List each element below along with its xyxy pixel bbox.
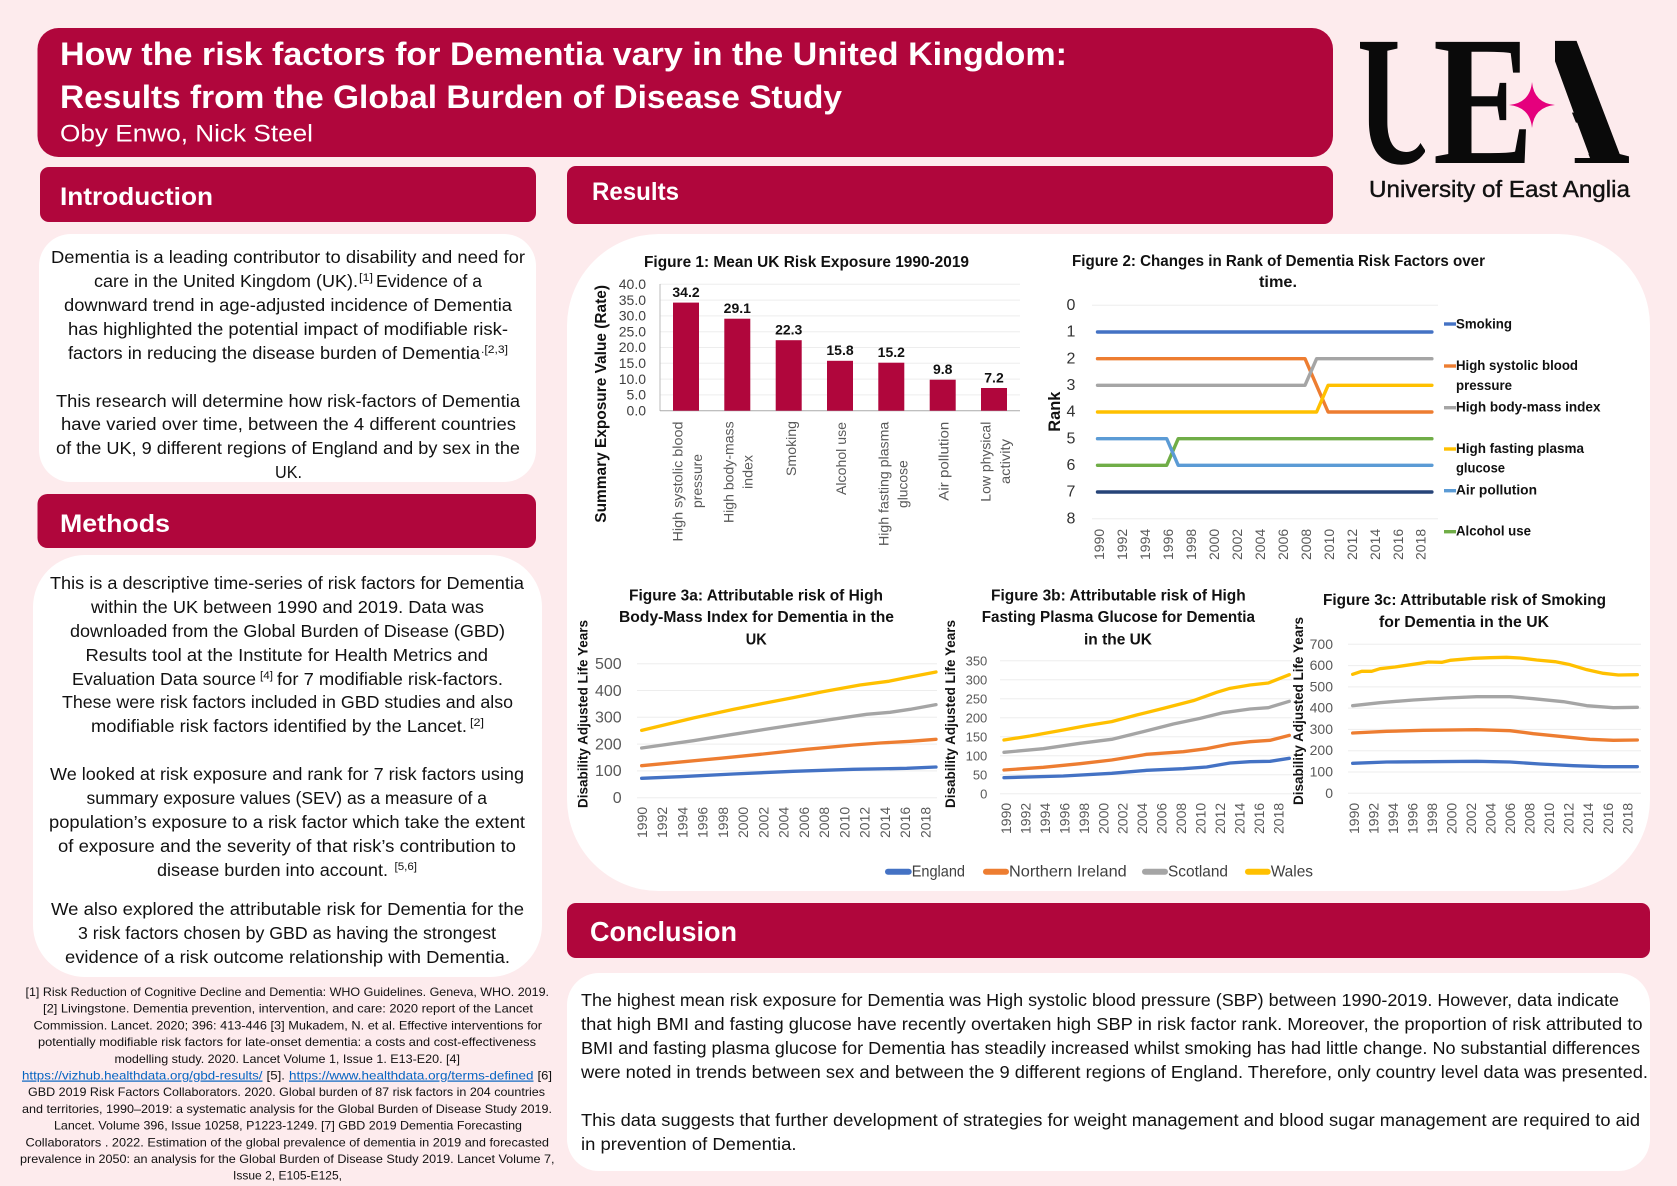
data lines <box>642 672 936 778</box>
y axis labels: 600 <box>1310 657 1333 673</box>
y axis labels: 35.0 <box>619 292 646 308</box>
y axis rank labels: 4 <box>1067 404 1076 421</box>
figure 3a title: Figure 3a: Attributable risk of High <box>629 588 883 605</box>
figure 3b title: in the UK <box>1084 632 1152 649</box>
x axis years: 1994 <box>1385 803 1401 834</box>
x axis years: 1990 <box>1091 529 1107 560</box>
x axis years: 2002 <box>1115 803 1131 834</box>
legend: countries <box>888 864 1313 881</box>
panel: conclusion text: that high BMI and fasting glucose have recently overtaken high SBP in risk factor rank. Moreover, the proportion of risk attributed to <box>581 1014 1643 1034</box>
x axis years: 2018 <box>1413 529 1429 560</box>
panel: conclusion text: were noted in trends between sex and between the 9 different regions of England. Therefore, only country level data was presented. <box>580 1062 1648 1082</box>
y axis labels: 25.0 <box>619 323 646 339</box>
y axis labels: 400 <box>595 683 622 700</box>
y axis labels: 150 <box>966 729 987 744</box>
x axis years: 2002 <box>755 807 771 838</box>
y axis labels: 200 <box>966 710 987 725</box>
x axis years: 1992 <box>654 807 670 838</box>
y axis labels <box>619 276 646 418</box>
legend: High body-mass index <box>1456 399 1601 415</box>
references: [1] Risk Reduction of Cognitive Decline and Dementia: WHO Guidelines. Geneva, WHO. 2019. <box>26 985 549 999</box>
x axis years: 2012 <box>1344 529 1360 560</box>
category labels: Smoking <box>783 421 799 476</box>
y axis labels: 200 <box>595 736 622 753</box>
references: and territories, 1990–2019: a systematic analysis for the Global Burden of Disease Study 2019. <box>22 1102 552 1116</box>
x axis years: 2010 <box>1541 803 1557 834</box>
category labels <box>670 421 1013 546</box>
legend: countries: Scotland <box>1168 864 1228 881</box>
bar value labels: 7.2 <box>984 370 1004 386</box>
references: modelling study. 2020. Lancet Volume 1, Issue 1. E13-E20. [4] <box>114 1052 460 1066</box>
y axis labels: 20.0 <box>619 339 646 355</box>
legend: countries: Wales <box>1271 864 1313 881</box>
y axis rank labels: 1 <box>1067 324 1076 341</box>
panel: introduction text: has highlighted the potential impact of modifiable risk- <box>68 319 508 339</box>
x axis years: 2008 <box>1298 529 1314 560</box>
bar value labels: 29.1 <box>724 300 751 316</box>
y axis labels: 0 <box>613 790 622 807</box>
x axis years: 2004 <box>1483 803 1499 834</box>
x axis years: 1996 <box>1160 529 1176 560</box>
figure 3b title: Figure 3b: Attributable risk of High <box>991 588 1246 605</box>
x axis years <box>634 807 933 838</box>
figure 3c title <box>1323 592 1606 631</box>
panel: methods text: evidence of a risk outcome relationship with Dementia. <box>65 947 510 967</box>
logo: University of East Anglia: E <box>1433 0 1534 204</box>
x axis years: 2016 <box>1600 803 1616 834</box>
references <box>20 985 554 1183</box>
bar value labels: 15.8 <box>826 342 854 358</box>
data lines <box>1353 657 1637 767</box>
figure 3a title: UK <box>746 632 767 649</box>
panel: introduction text: Dementia is a leading contributor to disability and need for <box>51 247 525 267</box>
x axis years: 2016 <box>897 807 913 838</box>
panel: methods text: disease burden into account. <box>157 860 388 880</box>
y axis labels: 15.0 <box>619 355 646 371</box>
figure 2 title <box>1072 253 1485 291</box>
panel: introduction text: have varied over time, between the 4 different countries <box>61 414 516 434</box>
category labels: High fasting plasma <box>875 421 891 546</box>
x axis years: 2018 <box>1619 803 1635 834</box>
x axis years: 2010 <box>836 807 852 838</box>
x axis years: 2006 <box>1275 529 1291 560</box>
panel: methods text: summary exposure values (SEV) as a measure of a <box>86 788 487 808</box>
references: [5]. <box>266 1068 285 1082</box>
y axis labels: 100 <box>966 748 987 763</box>
authors: Oby Enwo, Nick Steel <box>60 120 313 148</box>
y axis rank labels: 6 <box>1067 457 1076 474</box>
panel: introduction text: UK. <box>275 462 302 482</box>
bar value labels <box>672 284 1004 386</box>
x axis years: 1990 <box>1346 803 1362 834</box>
bar value labels: 34.2 <box>672 284 700 300</box>
x axis years: 2004 <box>1134 803 1150 834</box>
panel: introduction text: .[2,3] <box>481 344 508 356</box>
y axis rank labels: 7 <box>1067 484 1076 501</box>
x axis years: 2018 <box>917 807 933 838</box>
legend: countries: England <box>912 864 965 881</box>
y axis labels: 700 <box>1310 636 1333 652</box>
x axis years: 1994 <box>1037 803 1053 834</box>
panel: introduction text: factors in reducing the disease burden of Dementia <box>68 343 480 363</box>
heading: Results: Results <box>592 178 679 206</box>
category labels: Low physical <box>978 422 994 502</box>
y axis labels: 400 <box>1310 700 1333 716</box>
heading: Conclusion <box>567 903 1650 958</box>
x axis years: 1990 <box>998 803 1014 834</box>
logo: University of East Anglia: A <box>1496 0 1630 204</box>
panel: methods text: Evaluation Data source <box>72 669 256 689</box>
panel: conclusion text <box>567 973 1650 1171</box>
figure 3b title <box>982 588 1255 649</box>
panel: conclusion text: in prevention of Dementia. <box>581 1134 796 1154</box>
y axis labels <box>595 656 622 807</box>
references: Lancet. Volume 396, Issue 10258, P1223-1249. [7] GBD 2019 Dementia Forecasting <box>54 1119 522 1133</box>
heading: Introduction <box>40 167 536 222</box>
references: Issue 2, E105-E125, <box>233 1169 342 1183</box>
chart: Figure 3c smoking attributable risk <box>1290 592 1641 834</box>
x axis years: 2008 <box>1173 803 1189 834</box>
y axis labels: 100 <box>1310 764 1333 780</box>
chart: Figure 3a BMI attributable risk <box>574 588 937 838</box>
references: GBD 2019 Risk Factors Collaborators. 2020. Global burden of 87 risk factors in 204 countries <box>28 1085 545 1099</box>
y axis labels <box>966 653 987 801</box>
bars <box>673 303 1007 411</box>
title banner <box>38 28 1333 157</box>
x axis years: 1992 <box>1366 803 1382 834</box>
y axis labels: 30.0 <box>619 308 646 324</box>
panel: methods text: modifiable risk factors identified by the Lancet. <box>91 716 467 736</box>
x axis years: 2012 <box>1561 803 1577 834</box>
panel: methods text: Results tool at the Institute for Health Metrics and <box>86 645 488 665</box>
figure 3a title <box>619 588 894 649</box>
panel: methods text: within the UK between 1990 and 2019. Data was <box>90 597 484 617</box>
y axis labels: 500 <box>595 656 622 673</box>
panel: conclusion text: This data suggests that further development of strategies for weight management and blood sugar management are required to aid <box>581 1110 1640 1130</box>
x axis years: 1996 <box>1405 803 1421 834</box>
heading: Methods <box>38 494 536 548</box>
category labels: index <box>740 455 756 489</box>
panel: introduction text: downward trend in age-adjusted incidence of Dementia <box>64 295 512 315</box>
x axis years: 2006 <box>1502 803 1518 834</box>
bar value labels: 22.3 <box>775 322 803 338</box>
references: prevalence in 2050: an analysis for the Global Burden of Disease Study 2019. Lancet Volume 7, <box>20 1152 554 1166</box>
category labels: activity <box>997 439 1013 484</box>
x axis years: 1998 <box>1424 803 1440 834</box>
panel: methods text: of exposure and the severity of that risk’s contribution to <box>58 836 516 856</box>
references: potentially modifiable risk factors for late-onset dementia: a costs and cost-effectiveness <box>38 1035 536 1049</box>
x axis years: 1998 <box>715 807 731 838</box>
x axis years: 2008 <box>816 807 832 838</box>
y axis rank labels: 3 <box>1067 377 1076 394</box>
bar value labels: 15.2 <box>878 344 905 360</box>
y axis labels: 50 <box>973 767 987 782</box>
x axis years: 2006 <box>1154 803 1170 834</box>
data lines <box>1004 675 1289 778</box>
panel: conclusion text: BMI and fasting plasma glucose for Dementia has steadily increased whilst smoking has had little change. No substantial differences <box>581 1038 1640 1058</box>
x axis years: 2014 <box>1580 803 1596 834</box>
figure 3c title: for Dementia in the UK <box>1379 614 1549 631</box>
category labels: High systolic blood <box>670 422 686 542</box>
y axis labels: 350 <box>966 653 987 668</box>
legend: Smoking <box>1456 316 1512 332</box>
y axis title: Summary Exposure Value (Rate) <box>593 285 610 523</box>
x axis years <box>998 803 1286 834</box>
x axis years: 2004 <box>1252 529 1268 560</box>
panel: methods text: [5,6] <box>394 861 417 873</box>
y axis rank labels: 8 <box>1067 510 1076 527</box>
figure 3a title: Body-Mass Index for Dementia in the <box>619 609 894 626</box>
references: https://vizhub.healthdata.org/gbd-results/ <box>22 1068 263 1082</box>
panel: methods text: population’s exposure to a risk factor which take the extent <box>49 812 525 832</box>
y axis labels: 200 <box>1310 742 1333 758</box>
x axis years: 2014 <box>877 807 893 838</box>
rank lines <box>1098 332 1432 492</box>
panel: introduction text: [1] <box>359 272 373 284</box>
y axis labels: 0.0 <box>627 402 646 418</box>
legend: pressure <box>1456 377 1512 393</box>
references: Commission. Lancet. 2020; 396: 413-446 [3] Mukadem, N. et al. Effective interventions for <box>34 1018 542 1032</box>
x axis years: 2018 <box>1270 803 1286 834</box>
x axis years: 2002 <box>1463 803 1479 834</box>
x axis years: 1998 <box>1183 529 1199 560</box>
legend: Alcohol use <box>1456 522 1531 538</box>
chart: Figure 3b fasting plasma glucose attributable risk <box>942 588 1292 834</box>
y axis labels: 250 <box>966 691 987 706</box>
legend <box>1444 316 1601 538</box>
logo: University of East Anglia: U <box>1357 0 1444 203</box>
logo wordmark: University of East Anglia <box>1369 176 1630 202</box>
title line 1: How the risk factors for Dementia vary in the United Kingdom: <box>60 36 1067 72</box>
x axis years: 2012 <box>1212 803 1228 834</box>
y axis rank labels <box>1067 297 1076 527</box>
bar value labels: 9.8 <box>933 361 953 377</box>
figure 3b title: Fasting Plasma Glucose for Dementia <box>982 609 1255 626</box>
panel: methods text: These were risk factors included in GBD studies and also <box>62 692 513 712</box>
category labels: High body-mass <box>720 421 736 523</box>
heading: Results <box>567 166 1333 224</box>
panel: introduction text: of the UK, 9 different regions of England and by sex in the <box>56 438 520 458</box>
icon: pink star <box>1509 82 1555 128</box>
x axis years: 2016 <box>1251 803 1267 834</box>
legend: High fasting plasma <box>1456 440 1584 456</box>
y axis labels: 40.0 <box>619 276 646 292</box>
figure 1 title: Figure 1: Mean UK Risk Exposure 1990-2019 <box>644 254 969 271</box>
x axis years: 2000 <box>735 807 751 838</box>
y axis title: Rank <box>1045 391 1064 432</box>
chart: Figure 1 bar chart <box>593 254 1020 546</box>
category labels: glucose <box>895 460 911 508</box>
references: [2] Livingstone. Dementia prevention, intervention, and care: 2020 report of the Lancet <box>43 1002 534 1016</box>
category labels: Air pollution <box>935 422 951 501</box>
panel: methods text: for 7 modifiable risk-factors. <box>277 669 503 689</box>
y axis title: Disability Adjusted Life Years <box>574 620 590 808</box>
x axis years <box>1091 529 1429 560</box>
y axis labels: 0 <box>1325 785 1333 801</box>
x axis years: 1996 <box>695 807 711 838</box>
logo: University of East Anglia <box>1360 40 1630 202</box>
panel: methods text: We also explored the attributable risk for Dementia for the <box>51 899 524 919</box>
y axis rank labels: 0 <box>1067 297 1076 314</box>
y axis rank labels: 2 <box>1067 350 1076 367</box>
legend: glucose <box>1456 460 1505 476</box>
x axis years: 2000 <box>1095 803 1111 834</box>
x axis years: 2014 <box>1367 529 1383 560</box>
x axis years: 2006 <box>796 807 812 838</box>
legend: Air pollution <box>1456 482 1537 498</box>
panel: methods text: 3 risk factors chosen by GBD as having the strongest <box>78 923 496 943</box>
x axis years: 1990 <box>634 807 650 838</box>
heading: Conclusion: Conclusion <box>590 916 737 947</box>
panel: introduction text: This research will determine how risk-factors of Dementia <box>56 391 520 411</box>
x axis years: 1992 <box>1114 529 1130 560</box>
title line 2: Results from the Global Burden of Disease Study <box>60 79 842 115</box>
y axis labels: 0 <box>980 786 987 801</box>
y axis labels: 300 <box>1310 721 1333 737</box>
y axis labels: 10.0 <box>619 371 646 387</box>
y axis title: Disability Adjusted Life Years <box>942 620 958 808</box>
panel: methods text: downloaded from the Global Burden of Disease (GBD) <box>70 621 505 641</box>
x axis years: 1996 <box>1056 803 1072 834</box>
x axis years: 2000 <box>1444 803 1460 834</box>
y axis labels: 300 <box>966 672 987 687</box>
x axis years: 1992 <box>1018 803 1034 834</box>
x axis years: 2014 <box>1231 803 1247 834</box>
panel: methods text: [2] <box>470 717 484 729</box>
x axis years: 1994 <box>1137 529 1153 560</box>
y axis labels: 5.0 <box>627 387 646 403</box>
panel: methods text <box>33 555 542 977</box>
references: [6] <box>538 1068 552 1082</box>
y axis rank labels: 5 <box>1067 430 1076 447</box>
figure 2 title: time. <box>1259 274 1297 291</box>
x axis years: 2004 <box>776 807 792 838</box>
legend: countries: Northern Ireland <box>1009 864 1127 881</box>
y axis labels <box>1310 636 1333 801</box>
x axis years: 2000 <box>1206 529 1222 560</box>
x axis years: 1998 <box>1076 803 1092 834</box>
figure 2 title: Figure 2: Changes in Rank of Dementia Risk Factors over <box>1072 253 1485 270</box>
heading: Methods: Methods <box>60 510 170 538</box>
x axis years: 1994 <box>674 807 690 838</box>
references: Collaborators . 2022. Estimation of the global prevalence of dementia in 2019 and forecasted <box>26 1135 549 1149</box>
category labels: pressure <box>689 454 705 508</box>
panel: introduction text: Evidence of a <box>376 271 482 291</box>
y axis labels: 100 <box>595 763 622 780</box>
x axis years: 2002 <box>1229 529 1245 560</box>
chart: Figure 2 rank line chart <box>1045 253 1601 560</box>
panel: introduction text: care in the United Kingdom (UK). <box>94 271 358 291</box>
panel: methods text: This is a descriptive time-series of risk factors for Dementia <box>50 573 524 593</box>
figure 3c title: Figure 3c: Attributable risk of Smoking <box>1323 592 1606 609</box>
legend: High systolic blood <box>1456 357 1578 373</box>
x axis years: 2008 <box>1522 803 1538 834</box>
category labels: Alcohol use <box>833 422 849 495</box>
y axis title: Disability Adjusted Life Years <box>1290 617 1306 805</box>
x axis years: 2016 <box>1390 529 1406 560</box>
y axis labels: 300 <box>595 710 622 727</box>
heading: Introduction: Introduction <box>60 183 213 211</box>
panel: results background <box>567 234 1650 891</box>
references: https://www.healthdata.org/terms-defined <box>289 1068 534 1082</box>
panel: methods text: [4] <box>260 670 273 682</box>
y axis labels: 500 <box>1310 678 1333 694</box>
x axis years: 2012 <box>857 807 873 838</box>
panel: introduction text <box>39 234 536 482</box>
x axis years: 2010 <box>1321 529 1337 560</box>
panel: methods text: We looked at risk exposure and rank for 7 risk factors using <box>50 764 524 784</box>
panel: conclusion text: The highest mean risk exposure for Dementia was High systolic blood pressure (SBP) between 1990-2019. However, data indicate <box>581 990 1619 1010</box>
x axis years <box>1346 803 1635 834</box>
x axis years: 2010 <box>1192 803 1208 834</box>
